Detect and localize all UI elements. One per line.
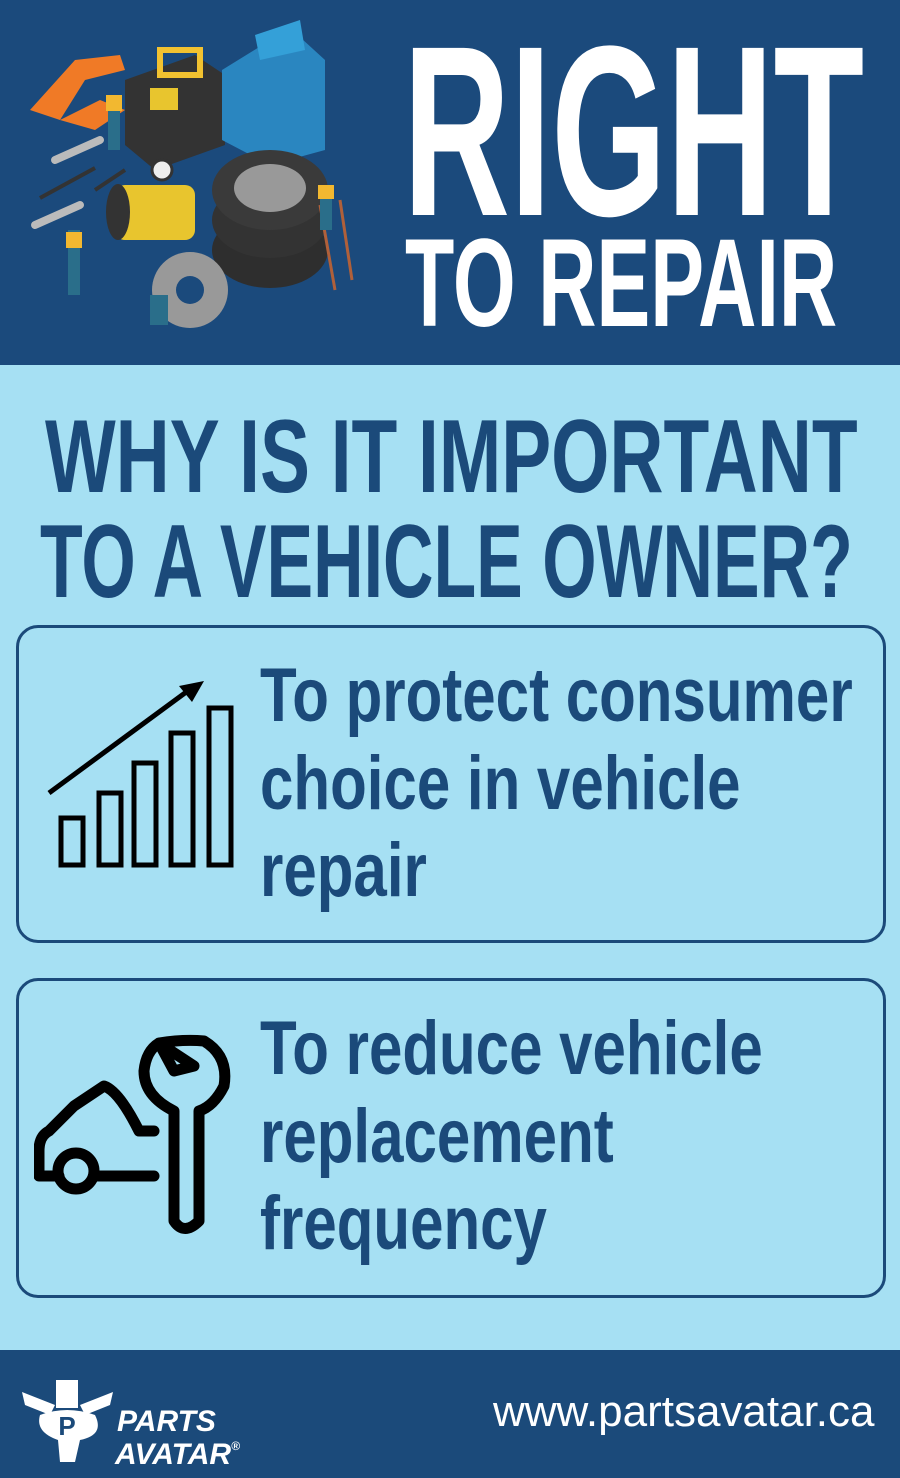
panel: consumer choice [16, 625, 886, 943]
logo: P [58, 1411, 76, 1441]
footer [0, 1350, 900, 1478]
panel: consumer choice: repair [260, 828, 427, 913]
heading: why important: TO A VEHICLE OWNER? [40, 504, 853, 620]
header panel [0, 0, 900, 365]
panel: consumer choice: choice in vehicle [260, 741, 741, 826]
title: TO REPAIR: TO REPAIR [405, 214, 837, 353]
logo: PARTS [117, 1405, 216, 1438]
panel: replacement frequency: frequency [260, 1181, 547, 1266]
heading: why important [40, 399, 858, 620]
title: RIGHT: RIGHT [403, 0, 864, 267]
text: To protect consumer [260, 653, 853, 738]
panel: replacement frequency [16, 978, 886, 1298]
heading: why important: WHY IS IT IMPORTANT [45, 399, 858, 515]
illustration: tools [30, 20, 354, 328]
icon: growth chart [48, 681, 234, 868]
logo [22, 1380, 240, 1471]
text: To reduce vehicle [260, 1006, 763, 1091]
panel: replacement frequency: replacement [260, 1094, 614, 1179]
website url: www.partsavatar.ca [493, 1387, 874, 1436]
logo: AVATAR® [115, 1438, 240, 1471]
icon: car with wrench [34, 1034, 230, 1234]
